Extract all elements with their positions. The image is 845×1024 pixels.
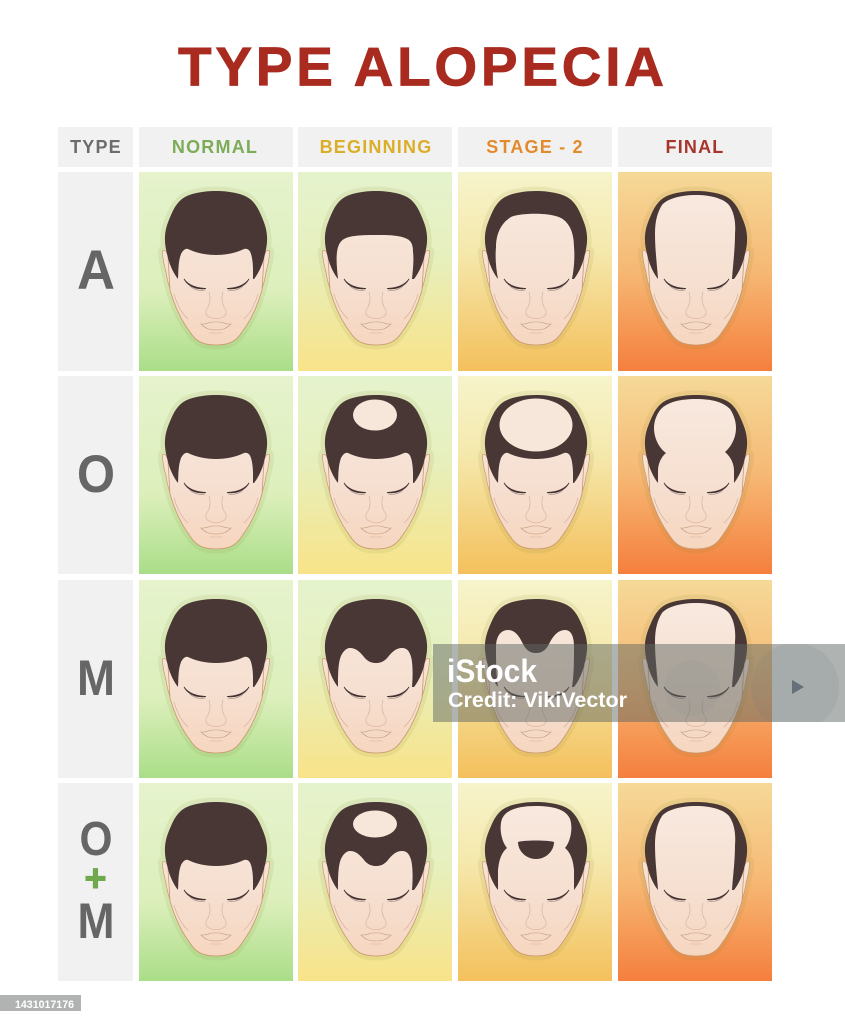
A beginning [298, 172, 452, 371]
O+M final [618, 783, 772, 981]
watermark band: Credit: VikiVector [448, 689, 627, 712]
header row [58, 127, 772, 167]
header: beginning [298, 127, 452, 167]
watermark band [433, 644, 845, 722]
row O+M [139, 783, 772, 981]
header: normal [139, 127, 293, 167]
M stage 2 [458, 580, 612, 778]
A stage 2 [458, 172, 612, 371]
O+M stage 2 [458, 783, 612, 981]
row label: M: M [77, 650, 115, 706]
O beginning [298, 376, 452, 574]
header: stage 2 [458, 127, 612, 167]
header: type [58, 127, 133, 167]
row label: O: O [77, 445, 115, 504]
header: beginning: BEGINNING [320, 137, 432, 157]
O+M normal [139, 783, 293, 981]
row label: A: A [77, 238, 115, 301]
M final [618, 580, 772, 778]
O normal [139, 376, 293, 574]
row A [139, 172, 772, 371]
row label: O + M: + [84, 858, 107, 900]
watermark band: iStock [447, 653, 537, 689]
header: stage 2: STAGE - 2 [486, 137, 584, 157]
row label: A [58, 172, 133, 371]
header: type: TYPE [70, 137, 122, 157]
header: final: FINAL [666, 137, 724, 157]
image id badge: 1431017176 [15, 999, 74, 1011]
row label: O + M: M [78, 893, 114, 949]
row O [139, 376, 772, 574]
M beginning [298, 580, 452, 778]
O+M beginning [298, 783, 452, 981]
row M [139, 580, 772, 778]
row label: O + M [58, 783, 133, 981]
A final [618, 172, 772, 371]
O stage 2 [458, 376, 612, 574]
row label: O + M: O [80, 813, 112, 866]
title: TYPE ALOPECIA [178, 36, 664, 98]
row label: O [58, 376, 133, 574]
O final [618, 376, 772, 574]
M normal [139, 580, 293, 778]
header: normal: NORMAL [172, 137, 258, 157]
A normal [139, 172, 293, 371]
image id badge [0, 995, 81, 1011]
header: final [618, 127, 772, 167]
row label: M [58, 580, 133, 778]
